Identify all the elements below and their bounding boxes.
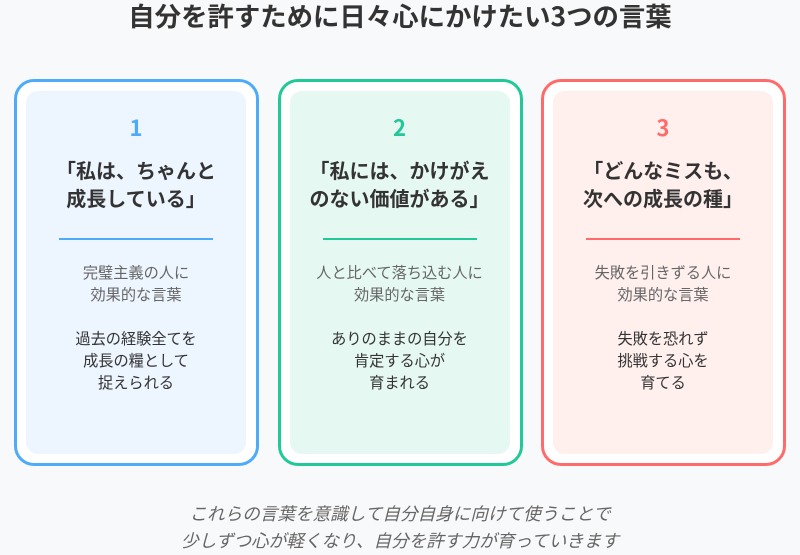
effect text 2: 育まれる xyxy=(369,371,430,393)
effect text 2: 肯定する心が xyxy=(354,349,445,371)
panel: word 3 xyxy=(541,79,786,466)
target audience 3 xyxy=(595,261,731,305)
panel background: word 1 xyxy=(26,91,246,454)
target audience 2 xyxy=(316,261,483,305)
heading: word 1: 成長している」 xyxy=(66,183,206,212)
effect text 3 xyxy=(617,327,709,393)
target audience 3: 失敗を引きずる人に xyxy=(595,261,731,283)
effect text 1: 成長の糧として xyxy=(83,349,189,371)
target audience 2: 人と比べて落ち込む人に xyxy=(316,261,483,283)
panel: word 2 xyxy=(278,79,522,466)
target audience 2: 効果的な言葉 xyxy=(354,283,445,305)
number 1: 1 xyxy=(130,111,142,143)
closing note: 少しずつ心が軽くなり、自分を許す力が育っていきます xyxy=(181,528,619,553)
heading: word 2: のない価値がある」 xyxy=(310,183,490,212)
effect text 1: 捉えられる xyxy=(98,371,174,393)
number 3: 3 xyxy=(656,111,669,143)
divider 1 xyxy=(59,238,213,240)
panel: word 1 xyxy=(14,79,259,466)
closing note: これらの言葉を意識して自分自身に向けて使うことで xyxy=(189,500,611,526)
effect text 3: 失敗を恐れず xyxy=(617,327,709,349)
effect text 2 xyxy=(331,327,468,393)
heading: word 2: 「私には、かけがえ xyxy=(310,155,490,184)
panel background: word 3 xyxy=(553,91,773,454)
heading: word 3: 次への成長の種」 xyxy=(583,183,743,212)
effect text 3: 挑戦する心を xyxy=(617,349,709,371)
target audience 1 xyxy=(83,261,189,305)
heading: word 1 xyxy=(56,155,216,212)
heading: word 3 xyxy=(583,155,743,212)
heading: word 2 xyxy=(310,155,490,212)
effect text 3: 育てる xyxy=(640,371,686,393)
target audience 1: 完璧主義の人に xyxy=(83,261,189,283)
target audience 1: 効果的な言葉 xyxy=(90,283,182,305)
effect text 1: 過去の経験全てを xyxy=(75,327,197,349)
divider 3 xyxy=(586,238,740,240)
closing note xyxy=(181,500,621,553)
heading: word 1: 「私は、ちゃんと xyxy=(56,155,216,184)
heading: word 3: 「どんなミスも、 xyxy=(583,155,743,184)
panel background: word 2 xyxy=(290,91,510,454)
effect text 1 xyxy=(75,327,197,393)
number 2: 2 xyxy=(393,111,406,143)
target audience 3: 効果的な言葉 xyxy=(617,283,709,305)
divider 2 xyxy=(322,238,476,240)
effect text 2: ありのままの自分を xyxy=(331,327,468,349)
